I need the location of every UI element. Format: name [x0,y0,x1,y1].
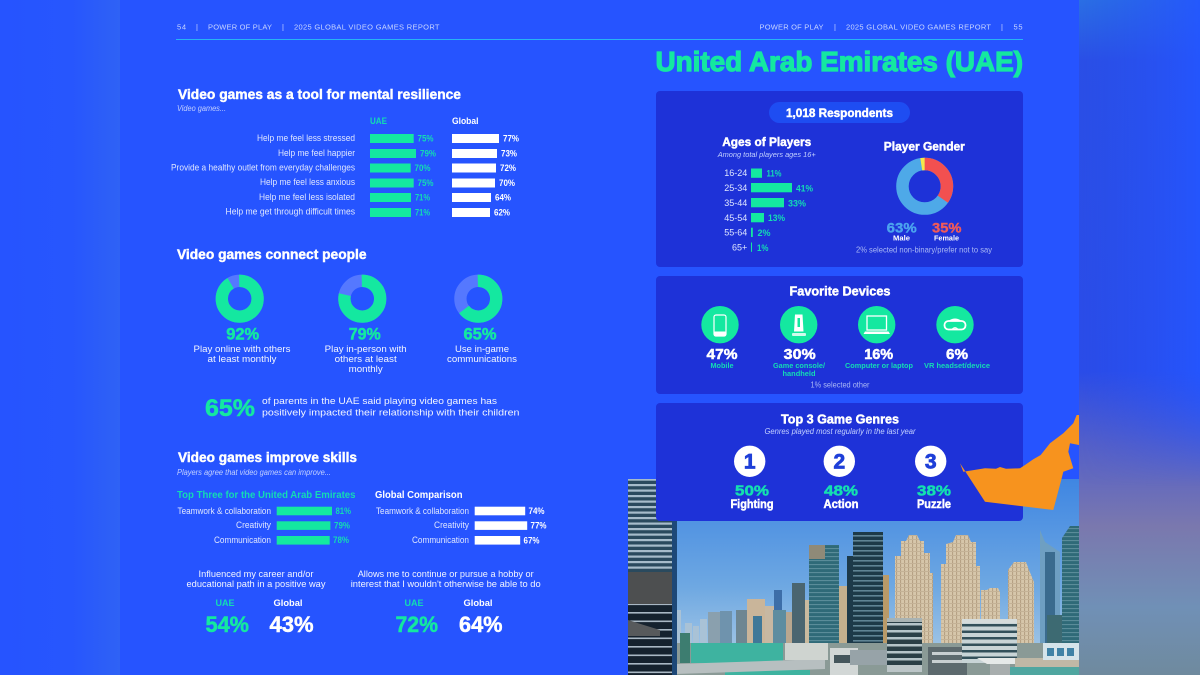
stat: hobby or interest comparison: 72% [396,612,438,637]
donut chart: player gender: 2% selected non-binary/prefer not to say [856,246,992,254]
map: UAE [960,415,1079,510]
genre 2: action: 48% [824,482,858,500]
donut stat: 92% play online: at least monthly [208,354,277,365]
heading: connect people: Video games connect people [177,246,367,262]
donut stat: 65% in-game communications [447,281,517,365]
bar chart: mental resilience: 75% [418,178,434,188]
bar chart: mental resilience: 79% [420,148,436,158]
donut stat: 92% play online: Play online with others [194,344,291,355]
bar chart: mental resilience: 70% [414,163,430,173]
bar chart: ages of players: 11% [766,168,782,178]
bar chart: global comparison: 74% [528,506,544,516]
bar chart: mental resilience: 71% [415,208,430,218]
bar chart: mental resilience: 77% [503,134,519,144]
bar chart: top three UAE: Communication [214,535,271,545]
header: right page [760,22,1022,32]
heading: favorite devices: Favorite Devices [790,284,891,298]
panel: top 3 game genres [656,403,1023,521]
bar chart: top three UAE: Creativity [236,520,271,530]
stat: career path comparison: UAE [216,598,234,608]
callout: parents 65% [205,395,520,422]
donut stat: 65% in-game communications: 65% [464,324,496,344]
stat: hobby or interest comparison: Allows me to continue or pursue a hobby or [358,569,534,580]
donut stat: 92% play online: 92% [226,324,259,344]
stat: career path comparison: 43% [270,612,314,637]
bar chart: ages of players: 35-44 [724,198,747,208]
header: left page [177,22,440,32]
callout: parents 65%: 65% [205,395,255,422]
subheading: video games: Video games... [177,104,226,113]
donut stat: 79% play in-person [325,281,407,375]
bar chart: mental resilience: 62% [494,208,510,218]
respondents pill: 1,018 Respondents [786,106,893,120]
bar chart: mental resilience: 70% [499,178,515,188]
device: VR headset [924,306,990,370]
stat: hobby or interest comparison [351,569,541,637]
genre 1: fighting: 50% [735,482,769,500]
bar chart: top three UAE: Teamwork & collaboration [178,506,271,516]
header: right page: 55 [1014,22,1022,32]
donut stat: 92% play online [194,281,291,365]
device: VR headset: 6% [946,346,968,363]
donut stat: 79% play in-person: monthly [349,364,383,375]
bar chart: mental resilience: 64% [495,192,511,202]
bar chart: global comparison: Teamwork & collaboration [376,506,469,516]
device: computer or laptop [845,306,913,370]
header: right page: | [1001,22,1003,32]
bar chart: top three UAE: Top Three for the United Arab Emirates [177,490,356,501]
genre 1: fighting: 1 [744,451,756,474]
bar chart: mental resilience: Provide a healthy outlet from everyday challenges [171,162,355,172]
bar chart: ages of players: 65+ [732,242,747,252]
note: other devices: 1% selected other [810,380,870,390]
bar chart: global comparison: Communication [412,535,469,545]
header: right page: 2025 GLOBAL VIDEO GAMES REPORT [846,22,991,32]
genre 1: fighting [730,446,774,511]
bar chart: ages of players: 41% [796,184,813,194]
genre 3: puzzle: Puzzle [917,499,951,511]
bar chart: ages of players: 55-64 [724,228,747,238]
title: United Arab Emirates: United Arab Emirates (UAE) [656,46,1023,77]
stat: career path comparison: Global [274,598,302,608]
bar chart: ages of players: Among total players ages 16+ [717,150,816,159]
genre 1: fighting: Fighting [730,499,774,511]
device: computer or laptop: Computer or laptop [845,361,913,370]
bar chart: ages of players: 25-34 [724,183,747,193]
heading: improve skills: Video games improve skills [178,449,357,465]
bar chart: mental resilience: 71% [415,192,430,202]
genre 2: action: Action [824,499,858,511]
bar chart: global comparison: Creativity [434,520,469,530]
header: left page: 54 [177,22,186,32]
bar chart: mental resilience: UAE [370,116,387,126]
stat: career path comparison: 54% [206,612,249,637]
genre 3: puzzle [915,446,951,511]
subheading: players agree: Players agree that video games can improve... [177,468,331,477]
bar chart: top three UAE: 78% [333,535,349,545]
stat: hobby or interest comparison: interest that I wouldn't otherwise be able to do [351,579,541,590]
donut chart: player gender: Player Gender [884,140,965,154]
header: right page: | [834,22,836,32]
donut chart: player gender: 63% [887,220,917,236]
device: game console: 30% [784,346,816,363]
device: mobile [701,306,739,370]
genre 3: puzzle: 38% [917,482,951,500]
bar chart: top three UAE: 79% [334,520,350,530]
bar chart: ages of players [717,135,816,253]
heading: top 3 genres: Top 3 Game Genres [781,412,899,426]
donut stat: 65% in-game communications: Use in-game [455,344,509,355]
bar chart: mental resilience: 75% [418,134,434,144]
bar chart: mental resilience: Help me feel less isolated [259,192,355,202]
bar chart: ages of players: 1% [757,243,768,253]
bar chart: ages of players: 16-24 [724,168,747,178]
header: left page: | [196,22,198,32]
bar chart: mental resilience: Help me feel less anxious [260,177,355,187]
panel: demographics [656,91,1023,267]
stat: career path comparison [186,569,326,637]
device: VR headset: VR headset/device [924,361,990,370]
header: left page: POWER OF PLAY [208,22,272,32]
bar chart: global comparison: 77% [530,520,546,530]
device: game console: Game console/ [773,361,826,370]
header: left page: | [282,22,284,32]
genre 3: puzzle: 3 [925,451,937,474]
genre 2: action [824,446,858,511]
donut chart: player gender [856,140,992,254]
stat: career path comparison: Influenced my career and/or [198,569,314,580]
bar chart: mental resilience: 73% [501,148,517,158]
donut chart: player gender: Female [934,234,959,242]
device: computer or laptop: 16% [864,346,893,363]
device: game console [773,306,826,378]
bar chart: mental resilience: 72% [500,163,516,173]
bar chart: ages of players: Ages of Players [722,135,812,149]
callout: parents 65%: positively impacted their relationship with their children [262,408,520,418]
bar chart: top three UAE: 81% [336,506,351,516]
device: mobile: Mobile [710,361,734,370]
donut stat: 79% play in-person: others at least [335,354,397,365]
stat: hobby or interest comparison: UAE [404,598,424,608]
bar chart: ages of players: 2% [758,228,770,238]
device: game console: handheld [782,369,816,378]
respondents pill [769,102,910,123]
bar chart: global comparison: 67% [524,536,540,546]
genre 2: action: 2 [833,451,845,474]
donut chart: player gender: 35% [932,220,962,236]
bar chart: mental resilience: Help me feel less stressed [257,133,355,143]
callout: parents 65%: of parents in the UAE said playing video games has [262,396,497,407]
bar chart: global comparison: Global Comparison [375,490,462,501]
stat: hobby or interest comparison: 64% [459,612,502,637]
bar chart: mental resilience: Help me feel happier [278,148,355,158]
donut chart: player gender: Male [893,234,910,242]
blurred backdrop: right [1079,0,1200,675]
report spread page [120,0,1079,675]
stat: career path comparison: educational path in a positive way [186,579,326,590]
donut stat: 79% play in-person: 79% [349,324,381,344]
bar chart: top three UAE [177,490,356,545]
blurred backdrop: left [0,0,120,675]
bar chart: global comparison [375,490,546,546]
bar chart: ages of players: 33% [788,198,806,208]
bar chart: mental resilience [171,116,519,218]
stat: hobby or interest comparison: Global [464,598,492,608]
heading: mental resilience: Video games as a tool for mental resilience [178,86,461,102]
header: left page: 2025 GLOBAL VIDEO GAMES REPORT [294,22,440,32]
bar chart: ages of players: 45-54 [724,213,747,223]
header: right page: POWER OF PLAY [760,22,824,32]
photo: Dubai Marina skyline [628,479,1079,675]
donut stat: 79% play in-person: Play in-person with [325,344,407,355]
subheading: genres played: Genres played most regularly in the last year [764,427,916,436]
bar chart: mental resilience: Global [452,116,478,126]
device: mobile: 47% [706,346,738,363]
bar chart: mental resilience: Help me get through difficult times [226,206,355,216]
panel: favorite devices [656,276,1023,394]
bar chart: ages of players: 13% [768,213,785,223]
donut stat: 65% in-game communications: communications [447,354,517,365]
